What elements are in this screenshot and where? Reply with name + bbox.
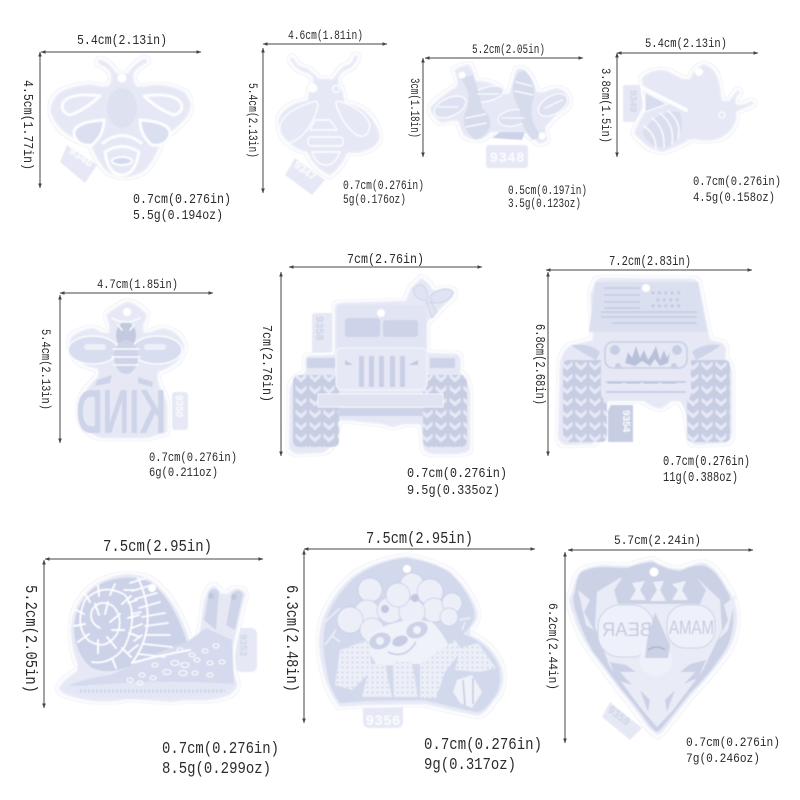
dimension: width 7.5cm: 7.5cm(2.95in): [103, 537, 212, 556]
specimen: mama bear: [545, 534, 780, 766]
dimension: height 5.4cm: 5.4cm(2.13in): [38, 329, 52, 410]
flowers: [337, 573, 462, 642]
spec: mama bear thickness and weight: 0.7cm(0.276in): [686, 736, 780, 750]
mould: twin bees: [427, 62, 573, 168]
tag: 9348: 9348: [490, 150, 524, 165]
lace scarf and limbs: [335, 640, 496, 698]
tag: 9346: 9346: [66, 143, 96, 170]
tag: 9356: [363, 705, 403, 728]
dimension: width 7.2cm: 7.2cm(2.83in): [609, 254, 691, 270]
tag: 9346: [60, 143, 97, 183]
tag: 9349: 9349: [627, 90, 638, 113]
specimen: bee one: [19, 33, 231, 224]
spec: bee one thickness and weight: 5.5g(0.194oz): [133, 208, 223, 224]
dimension: height 5.2cm: 5.2cm(2.05in): [21, 585, 40, 693]
spec: jeep with bow thickness and weight: 0.7cm(0.276in): [407, 466, 507, 482]
tag: 9354: 9354: [620, 410, 631, 433]
spec: snail thickness and weight: [162, 739, 279, 778]
dimension: height 3.8cm: [598, 53, 617, 157]
spec: bee kind thickness and weight: 0.7cm(0.276in): [149, 451, 237, 465]
mirrored word KIND: KIND: [76, 378, 166, 447]
spec: mama bear thickness and weight: 7g(0.246oz): [686, 752, 760, 766]
dimension: height 7cm: 7cm(2.76in): [258, 325, 274, 402]
mould: jeep with flag: ★★★★: [655, 296, 681, 304]
dimension: height 3cm: [407, 58, 423, 157]
spec: sloth thickness and weight: 9g(0.317oz): [424, 755, 516, 774]
mould: jeep with flag: ★★★★★: [650, 302, 682, 310]
tag: 9354: [608, 405, 633, 442]
mould: sloth: [316, 553, 506, 728]
tag: 9350: 9350: [173, 395, 184, 418]
spec: snail thickness and weight: 0.7cm(0.276in): [162, 739, 279, 758]
spec: jeep with flag thickness and weight: [663, 454, 750, 486]
dimension: height 6.3cm: 6.3cm(2.48in): [282, 585, 301, 692]
specimen: twin bees: [407, 43, 587, 211]
glasses with mirrored text: BEAR: [602, 620, 652, 641]
glasses with mirrored text: [598, 605, 715, 657]
spec: sloth thickness and weight: [424, 735, 542, 774]
dimension: width 5.4cm: 5.4cm(2.13in): [77, 33, 167, 49]
mould: bee kind: [66, 298, 188, 447]
dimension: height 3cm: 3cm(1.18in): [407, 78, 421, 138]
specimen: jeep with flag: [531, 254, 752, 486]
dimension: height 4.5cm: 4.5cm(1.77in): [19, 80, 35, 170]
sloth face: [367, 619, 452, 666]
tag: 9359: 9359: [605, 704, 632, 728]
mould: jeep with bow: [286, 274, 473, 457]
dimension: width 4.7cm: 4.7cm(1.85in): [97, 278, 178, 292]
mould: bee two: [275, 57, 383, 195]
dimension: width 5.4cm: 5.4cm(2.13in): [645, 37, 727, 51]
mould: bee one: [48, 61, 194, 183]
spec: bee two thickness and weight: 0.7cm(0.276in): [343, 179, 424, 193]
spec: jeep with flag thickness and weight: 0.7cm(0.276in): [663, 454, 750, 470]
spec: bee two thickness and weight: 5g(0.176oz): [343, 193, 406, 207]
specimen: jeep with bow: [258, 252, 507, 499]
spec: twin bees thickness and weight: 0.5cm(0.197in): [508, 184, 587, 198]
dimension: width 7cm: 7cm(2.76in): [347, 252, 424, 268]
mould: mama bear: [566, 556, 740, 740]
dimension: width 5.2cm: 5.2cm(2.05in): [472, 43, 545, 57]
mould: jeep with flag: ★★★★★: [650, 289, 682, 297]
spec: bee kind thickness and weight: 6g(0.211oz): [149, 466, 218, 480]
tag: 9358: [312, 313, 334, 353]
spec: twin bees thickness and weight: 3.5g(0.123oz): [508, 197, 581, 211]
spec: mama bear thickness and weight: [686, 736, 780, 766]
spec: jeep with bow thickness and weight: 9.5g(0.335oz): [407, 483, 500, 499]
specimen: bee two: [245, 29, 424, 207]
spec: round bee thickness and weight: 0.7cm(0.276in): [693, 175, 781, 189]
dimension: width 4.6cm: 4.6cm(1.81in): [288, 29, 363, 43]
tag: 9359: [602, 702, 642, 740]
glasses with mirrored text: MAMA: [669, 618, 714, 639]
spec: snail thickness and weight: 8.5g(0.299oz): [162, 759, 271, 778]
spec: jeep with flag thickness and weight: 11g(0.388oz): [663, 470, 738, 486]
spec: round bee thickness and weight: [693, 175, 781, 205]
tag: 9356: 9356: [366, 712, 400, 728]
tag: 9347: 9347: [291, 159, 318, 183]
specimen: snail: [21, 537, 279, 778]
spec: bee one thickness and weight: [133, 192, 231, 224]
specimen: bee kind: [38, 278, 237, 480]
bear face: [595, 578, 722, 727]
tag: 9353: 9353: [237, 634, 248, 657]
spec: bee one thickness and weight: 0.7cm(0.276in): [133, 192, 231, 208]
dimension: height 6.8cm: 6.8cm(2.68in): [531, 324, 547, 405]
dimension: height 6.2cm: 6.2cm(2.44in): [545, 603, 559, 690]
spec: twin bees thickness and weight: [508, 184, 587, 211]
mould: jeep with flag: [555, 275, 735, 448]
spec: bee two thickness and weight: [343, 179, 424, 207]
mould: snail: [55, 571, 257, 705]
spec: bee kind thickness and weight: [149, 451, 237, 480]
tag: 9350: [172, 392, 188, 430]
dimension: height 3.8cm: 3.8cm(1.5in): [598, 68, 612, 143]
dimension: width 7.5cm: 7.5cm(2.95in): [366, 529, 473, 548]
dimension: height 5.4cm: 5.4cm(2.13in): [245, 83, 259, 158]
spec: round bee thickness and weight: 4.5g(0.158oz): [693, 191, 775, 205]
specimen: sloth: [282, 529, 542, 774]
spec: jeep with bow thickness and weight: [407, 466, 507, 499]
specimen: round bee: [598, 37, 781, 205]
dimension: height 4.5cm: [19, 52, 40, 188]
spec: sloth thickness and weight: 0.7cm(0.276in): [424, 735, 542, 754]
tag: 9348: [486, 145, 528, 168]
tag: 9358: 9358: [313, 316, 325, 340]
dimension: width 5.7cm: 5.7cm(2.24in): [614, 534, 701, 548]
mould: round bee: [623, 61, 752, 155]
tag: 9353: [235, 628, 257, 672]
